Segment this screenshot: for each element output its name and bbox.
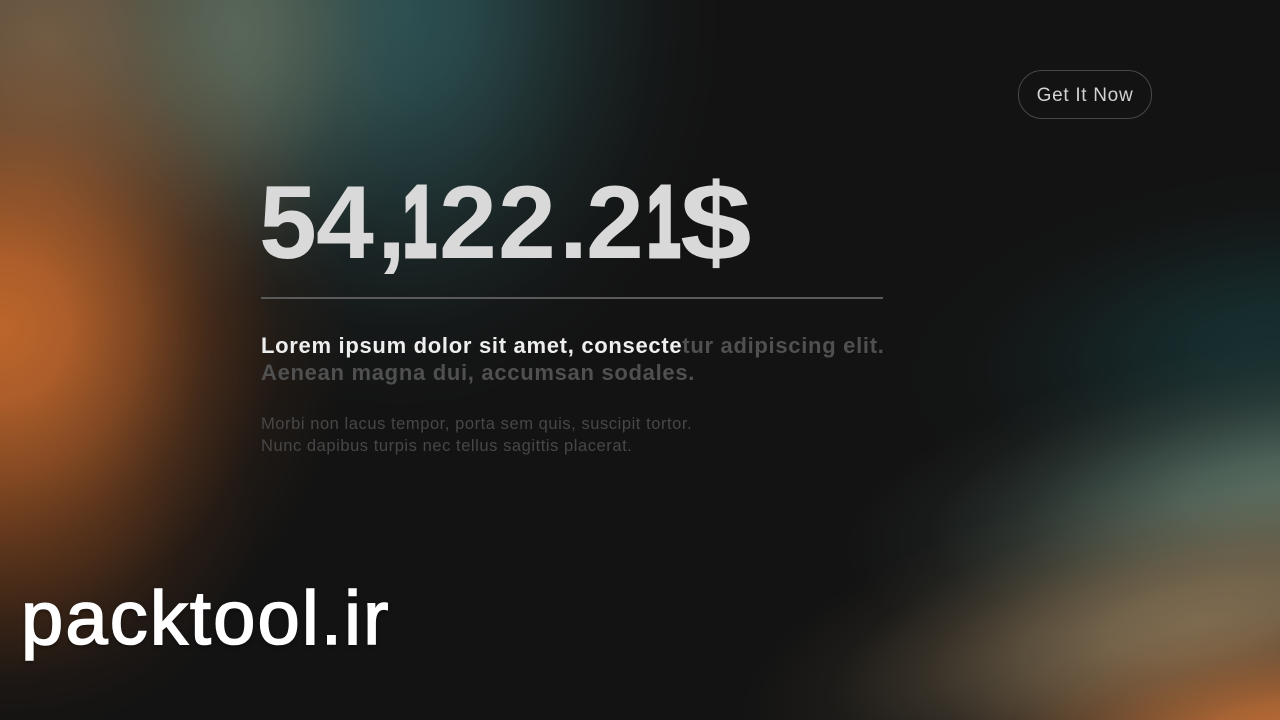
- headline value: $: [680, 162, 752, 284]
- headline value: 22.2: [439, 165, 644, 281]
- body text: [261, 415, 692, 455]
- button: Get It Now: Get It Now: [1037, 85, 1133, 106]
- subheading text: Aenean magna dui, accumsan sodales.: [261, 360, 695, 385]
- headline value: 1: [403, 166, 436, 278]
- watermark: packtool.ir: packtool.ir: [21, 576, 390, 661]
- headline value: 1: [647, 166, 680, 278]
- subheading text: Lorem ipsum dolor sit amet, consectetur adipiscing elit.: [261, 333, 885, 358]
- headline value: [259, 162, 752, 284]
- divider: [261, 297, 883, 298]
- body text: Nunc dapibus turpis nec tellus sagittis placerat.: [261, 437, 632, 455]
- headline value: 54,: [259, 165, 406, 281]
- subheading text: [261, 333, 885, 385]
- body text: Morbi non lacus tempor, porta sem quis, suscipit tortor.: [261, 415, 692, 433]
- button: Get It Now: [1018, 70, 1152, 119]
